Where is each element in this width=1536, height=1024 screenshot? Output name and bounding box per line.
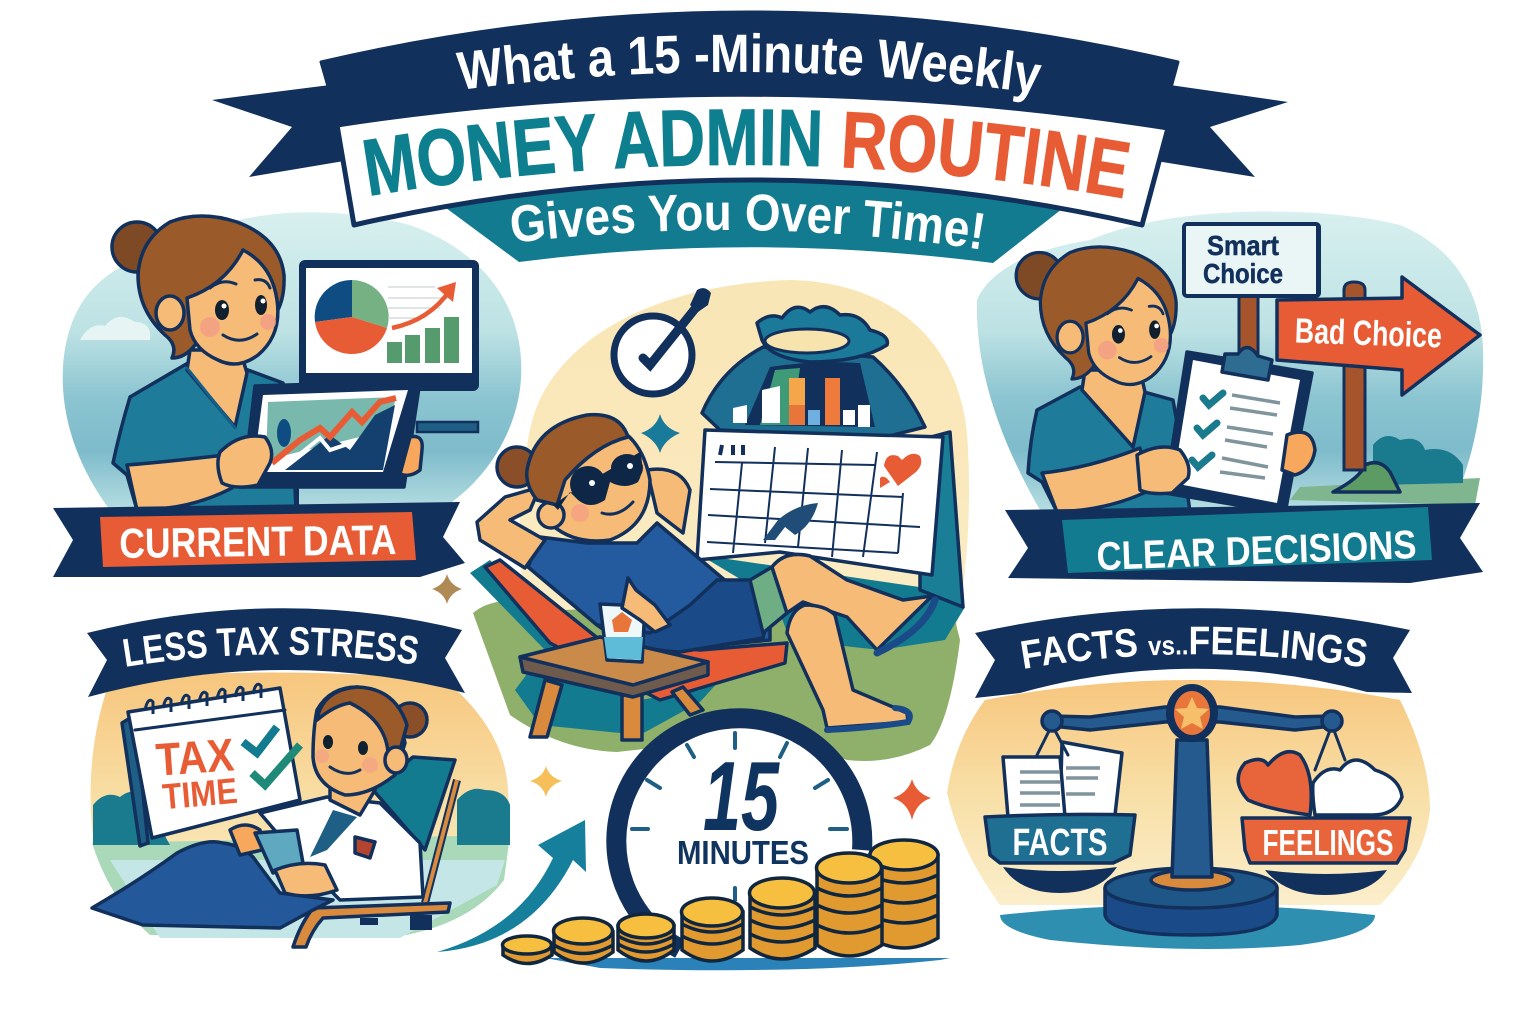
icon: growth arrow [437, 820, 586, 952]
icon: grass [473, 600, 960, 761]
icon: desk calendar [697, 430, 963, 607]
icon: woman with bun [112, 216, 296, 510]
icon: 15 minutes clock [607, 709, 869, 971]
icon: water reflection [1000, 905, 1375, 949]
ribbon: less tax stress: LESS TAX STRESS [123, 626, 418, 667]
ribbon: clear decisions [1005, 503, 1483, 583]
icon: tax calendar: TAX [154, 728, 236, 786]
ribbon: current data: CURRENT DATA [119, 516, 397, 567]
ribbon: less tax stress [87, 608, 465, 697]
icon: 15 minutes clock: MINUTES [677, 834, 809, 871]
coin shadow [545, 958, 950, 970]
scale pan: facts: FACTS [1012, 822, 1108, 864]
icon: 15 minutes clock: 15 [703, 741, 780, 851]
panel: clear decisions [977, 211, 1483, 583]
banner tails [212, 85, 350, 177]
icon: sparkle [641, 414, 680, 453]
icon: hill and bushes [1290, 436, 1480, 505]
icon: lounge chair [293, 757, 457, 947]
icon: woman reading [92, 687, 427, 928]
icon: coin stacks [502, 840, 938, 964]
icon: signpost [1184, 224, 1480, 470]
ribbon: facts vs feelings: FACTS vs..FEELINGS [1021, 626, 1367, 669]
icon: side table with drink [520, 578, 708, 740]
icon: signpost: Bad Choice [1294, 311, 1443, 356]
icon: teal shadow [470, 555, 965, 735]
top banner text: What a 15 -Minute Weekly [456, 32, 1042, 102]
icon: sparkles [432, 574, 931, 820]
subtitle banner [442, 175, 1067, 263]
icon: woman with bun [1016, 247, 1190, 512]
title banner [212, 10, 1288, 263]
icon: relaxing man [477, 415, 935, 730]
icon: green and pond [92, 835, 510, 937]
icon: tax calendar: TIME [161, 770, 239, 817]
icon: tablet with line chart [218, 381, 422, 487]
icon: tax calendar [122, 684, 300, 846]
panel background [947, 680, 1430, 905]
panel background [520, 280, 969, 700]
panel background [90, 672, 509, 935]
ribbon: facts vs feelings [975, 608, 1412, 698]
panel: current data [53, 212, 521, 577]
panel background [977, 211, 1483, 510]
icon: money bag with bars [702, 307, 925, 437]
icon: clipboard checklist [1137, 347, 1315, 513]
scale pan: facts [985, 814, 1135, 893]
top banner [321, 12, 1178, 128]
subtitle text: Gives You Over Time! [512, 194, 984, 250]
icon: documents [1003, 742, 1122, 817]
clouds [80, 317, 150, 340]
scale pan: feelings: FEELINGS [1262, 822, 1394, 863]
panel: less tax stress [90, 672, 510, 947]
icon: heart and cloud [1238, 752, 1402, 815]
icon: monitor with chart [293, 260, 479, 512]
icon: balance scale [1037, 684, 1345, 935]
icon: signpost: Choice [1203, 258, 1283, 289]
panel background [63, 212, 521, 510]
icon: signpost: Smart [1207, 230, 1279, 261]
icon: bushes [93, 789, 510, 845]
icon: clock check [614, 288, 711, 394]
scale pan: feelings [1242, 818, 1410, 895]
ribbon: current data [53, 502, 465, 577]
main title box [337, 94, 1168, 225]
main title: MONEY ADMIN ROUTINE [363, 109, 1130, 198]
panel: facts vs feelings [947, 680, 1430, 949]
ribbon: clear decisions: CLEAR DECISIONS [1096, 523, 1417, 579]
panel: relaxed man centre [470, 280, 969, 761]
